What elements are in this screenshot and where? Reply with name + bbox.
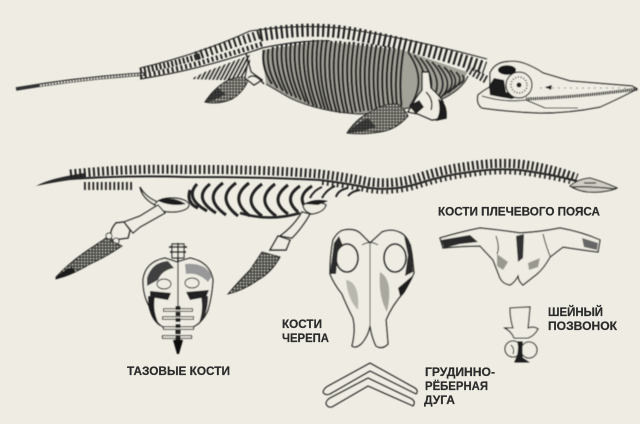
ichthyosaur skeleton: [16, 27, 637, 134]
label: skull bones: КОСТИ: [282, 319, 322, 331]
sternocostal arch: [323, 363, 417, 407]
centre bone: [516, 234, 524, 262]
rear limb: [56, 205, 165, 279]
pelvic bones: [245, 53, 264, 85]
cervical vertebra: [505, 307, 538, 362]
label: sternocostal arch: ДУГА: [424, 395, 455, 407]
eye orbit: [506, 72, 532, 98]
jaw line: [526, 89, 637, 99]
tail end: [173, 340, 183, 354]
tail chevrons: [84, 182, 134, 190]
skull outline: [330, 229, 414, 348]
ichthyosaur skull: [478, 61, 637, 113]
sacral vertebra top: [172, 244, 184, 258]
pelvis openings: [157, 279, 171, 289]
sacral ribs: [162, 310, 194, 337]
front limb: [228, 200, 328, 294]
plesiosaur skeleton: [36, 163, 617, 294]
dorsal spine: [140, 27, 487, 80]
midline: [177, 262, 179, 310]
spine and neck: [70, 163, 577, 192]
plesiosaur skull: [570, 178, 617, 192]
main ribcage: [263, 40, 404, 113]
label: sternocostal arch: РЁБЕРНАЯ: [425, 380, 488, 393]
shoulder girdle figure: [440, 228, 600, 285]
label: pelvic bones: ТАЗОВЫЕ КОСТИ: [127, 366, 230, 378]
shoulder girdle: [408, 72, 446, 120]
front flipper: [347, 104, 408, 134]
rear flipper: [205, 77, 249, 103]
plesiosaur ribs: [189, 183, 360, 218]
label: skull bones: ЧЕРЕПА: [282, 333, 329, 345]
skull openings: [336, 244, 358, 272]
lower crescents: [148, 296, 160, 326]
pelvis outline: [143, 258, 213, 327]
front ribs: [408, 52, 464, 106]
midline and shading: [362, 242, 378, 326]
label: cervical vertebra: ШЕЙНЫЙ: [548, 306, 603, 319]
dark temporal area: [489, 78, 522, 99]
belly line: [266, 76, 468, 114]
shading: [497, 254, 508, 270]
dark side bones: [330, 236, 343, 274]
label: cervical vertebra: ПОЗВОНОК: [548, 321, 618, 333]
nostril and upper opening: [498, 65, 516, 75]
hip bones: [140, 187, 189, 212]
pelvis shading: [147, 261, 174, 286]
dark left bar: [441, 235, 478, 248]
label: shoulder girdle: КОСТИ ПЛЕЧЕВОГО ПОЯСА: [438, 206, 600, 218]
girdle outline: [440, 228, 600, 285]
ribcage tone: [262, 41, 467, 114]
pelvic bones figure: [143, 243, 213, 354]
tail tip: [36, 173, 85, 186]
hind ribs: [191, 55, 250, 80]
label: sternocostal arch: ГРУДИННО-: [425, 367, 495, 379]
skull bones figure: [330, 229, 414, 348]
tail: [16, 74, 145, 89]
